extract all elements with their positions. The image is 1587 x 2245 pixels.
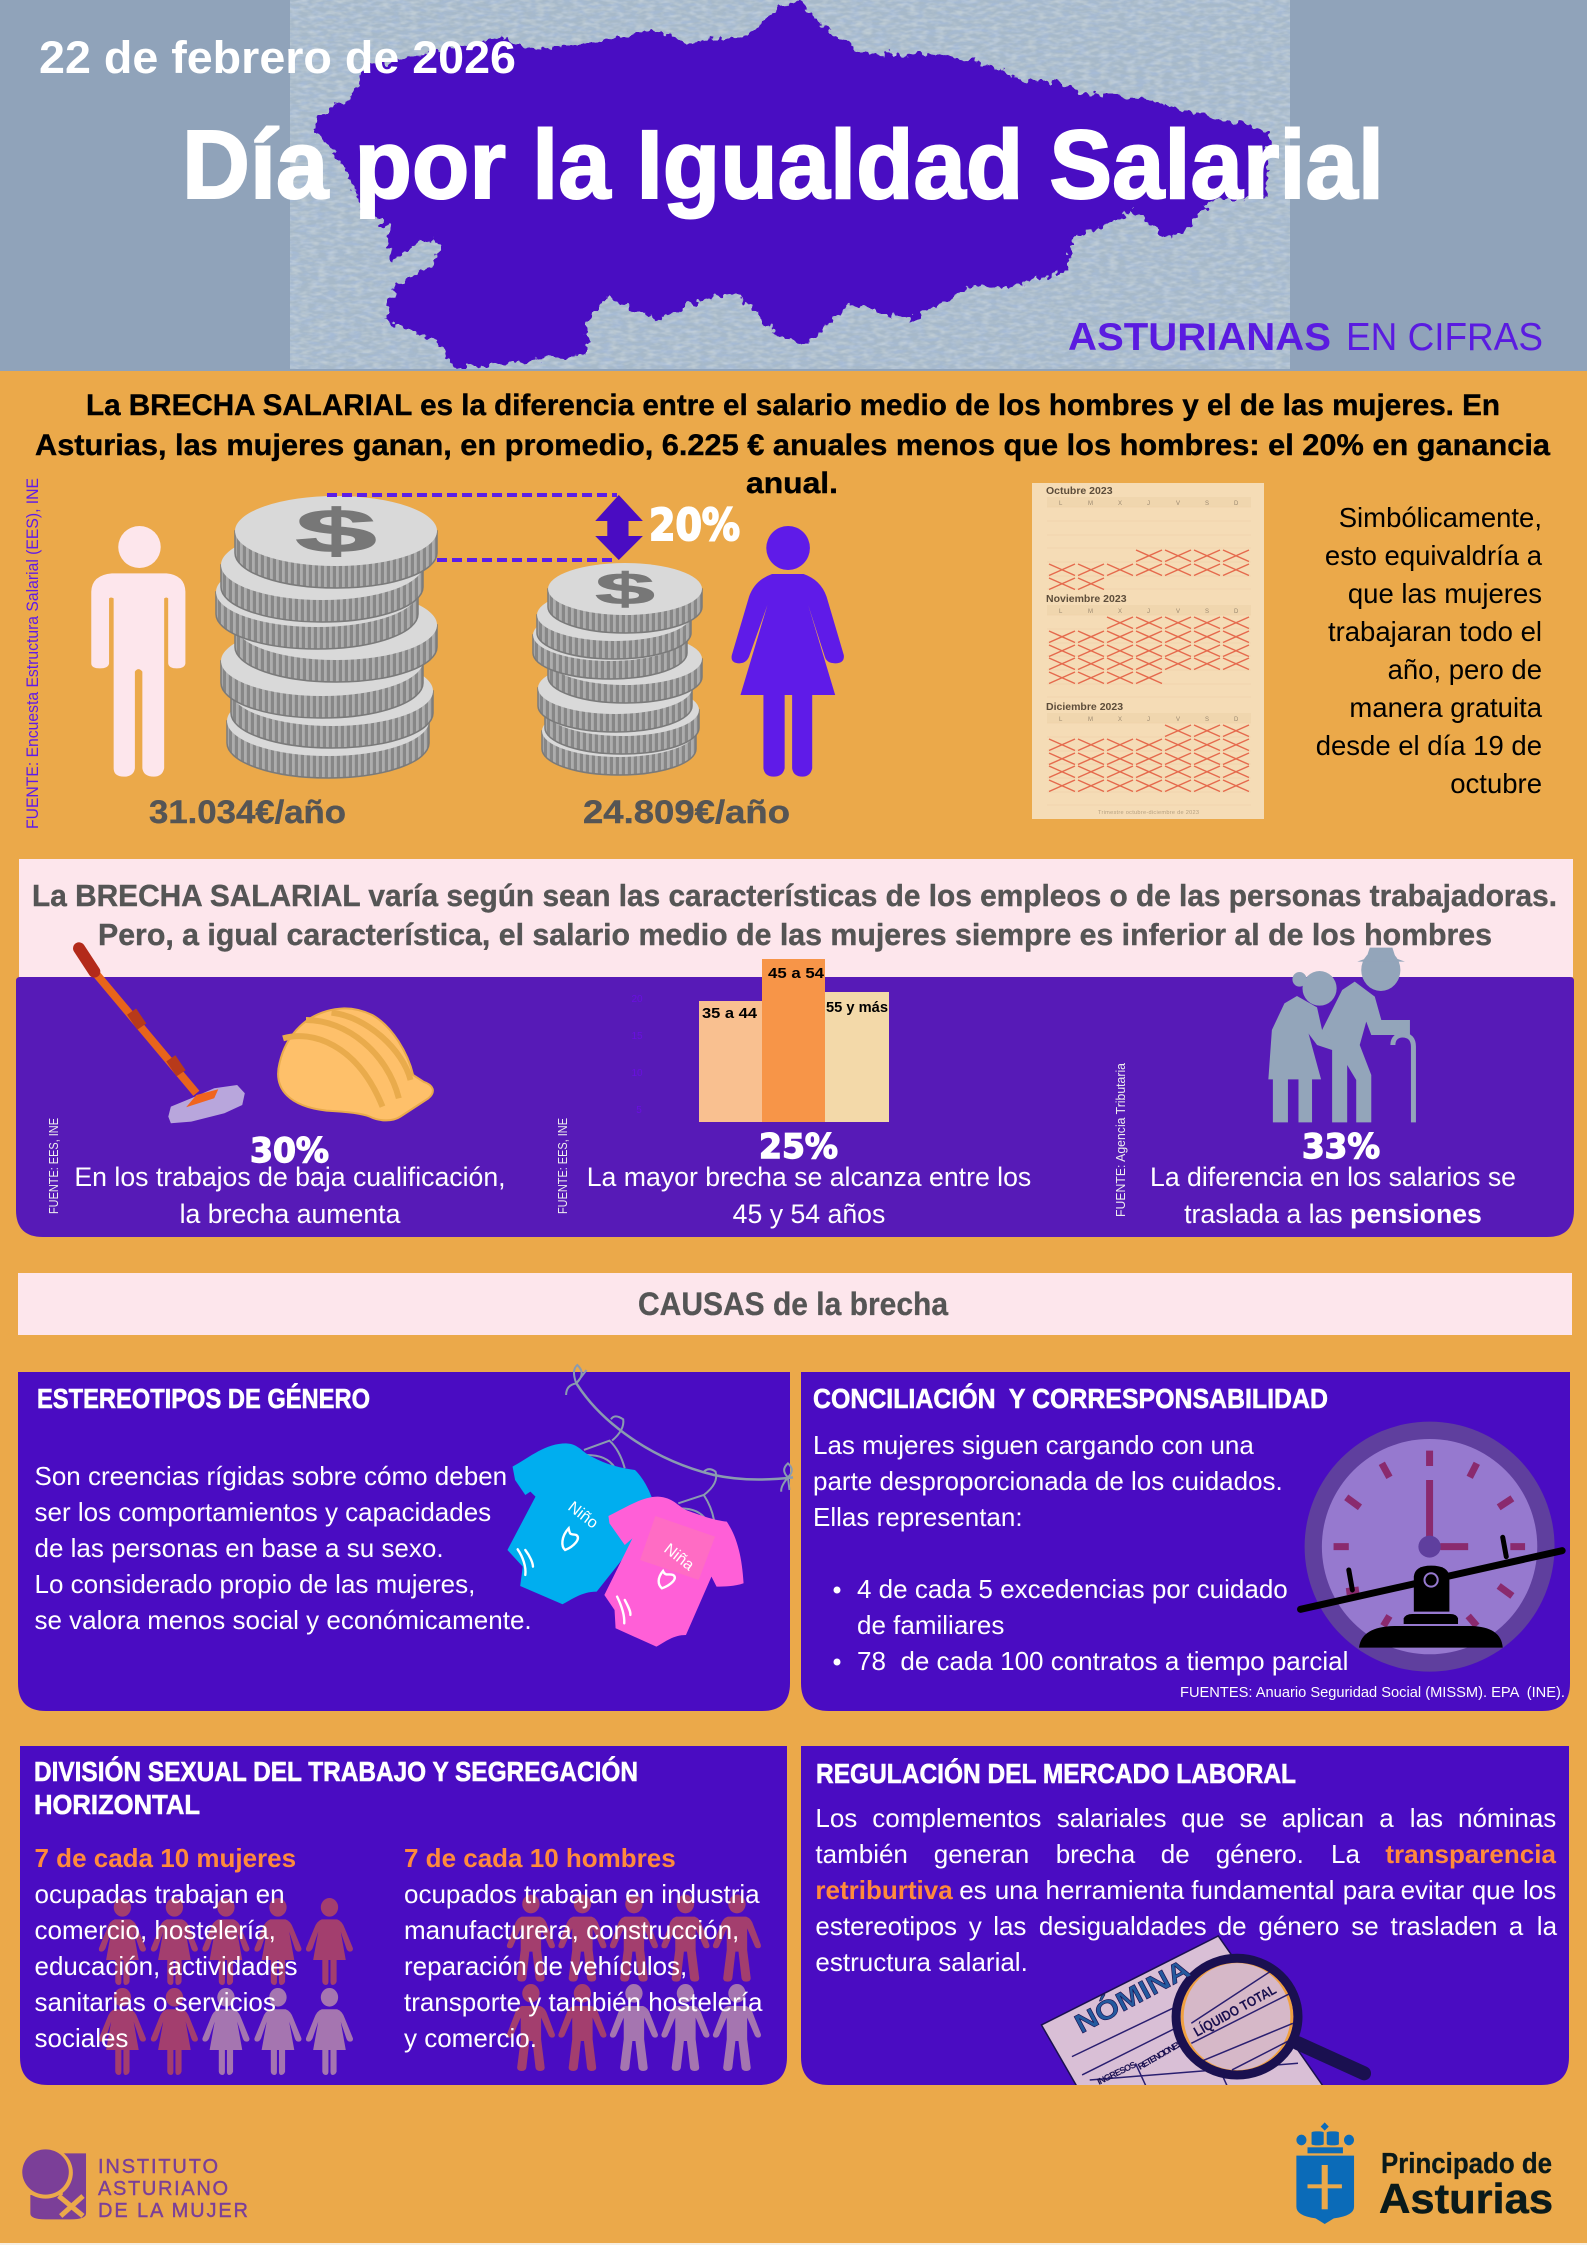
date: 22 de febrero de 2026 <box>39 32 516 83</box>
wordmark <box>1379 2148 1553 2222</box>
heading: DIVISIÓN SEXUAL DEL TRABAJO Y SEGREGACIÓN <box>34 1756 638 1787</box>
bar chart: age groups: 55 y más <box>826 999 888 1016</box>
intro definition text: anual. <box>746 467 838 500</box>
body text: La <box>1331 1839 1360 1869</box>
body text: también <box>815 1839 908 1869</box>
male salary: 31.034€/año <box>149 794 346 830</box>
panel: variation stats <box>16 948 1574 1237</box>
symbolic explanation text: trabajaran todo el <box>1328 616 1542 647</box>
illustration: clock and seesaw <box>1301 1422 1562 1672</box>
body text: ser los comportamientos y capacidades <box>34 1497 491 1527</box>
women text <box>34 1843 298 2053</box>
small coin stack: $ <box>595 564 655 614</box>
calendar image: Trimestre octubre-diciembre de 2023 <box>1098 810 1199 816</box>
calendar image: V <box>1176 717 1180 723</box>
bullet list <box>834 1574 1348 1676</box>
icon: shield with crown and cross <box>1296 2122 1354 2224</box>
calendar image: X <box>1118 501 1122 507</box>
heading: CONCILIACIÓN Y CORRESPONSABILIDAD <box>813 1383 1328 1414</box>
bar chart: age groups <box>631 959 889 1122</box>
source: Agencia Tributaria: FUENTE: Agencia Tributaria <box>1113 1062 1128 1217</box>
gap percent: 20% <box>649 500 740 551</box>
calendar image: M <box>1088 717 1093 723</box>
calendar image: J <box>1147 717 1150 723</box>
woman figure <box>732 526 844 777</box>
panel: pink variation heading: La BRECHA SALARIAL varía según sean las características de los empleos o de las personas trabajadoras. <box>32 878 1557 913</box>
wordmark: Principado de <box>1381 2148 1552 2180</box>
body text: transparencia <box>1385 1839 1556 1869</box>
symbolic explanation text: año, pero de <box>1388 654 1542 685</box>
logo: Instituto Asturiano de la Mujer: ASTURIANO <box>98 2178 228 2200</box>
panel: causes heading <box>18 1273 1572 1335</box>
stat: low qualification <box>74 1131 506 1229</box>
calendar image: V <box>1176 609 1180 615</box>
stat: age: 45 y 54 años <box>733 1199 885 1229</box>
body text: estructura salarial. <box>815 1947 1028 1977</box>
illustration: baby clothes on a line: Niña <box>661 1541 697 1574</box>
stat: pensions: 33% <box>1302 1127 1380 1167</box>
calendar image: D <box>1234 609 1239 615</box>
panel: work-life balance <box>801 1372 1570 1711</box>
sources: FUENTES: Anuario Seguridad Social (MISSM). EPA (INE). <box>1180 1684 1565 1701</box>
panel: pink variation heading <box>19 859 1573 977</box>
calendar image: X <box>1118 609 1122 615</box>
november crosses <box>1049 617 1249 684</box>
body text: género <box>1258 1911 1339 1941</box>
heading: REGULACIÓN DEL MERCADO LABORAL <box>816 1758 1296 1789</box>
body text: fundamental <box>1191 1875 1334 1905</box>
body text: se <box>1240 1803 1267 1833</box>
stat: pensions: traslada a las pensiones <box>1184 1199 1482 1229</box>
illustration: payslip and magnifier: LÍQUIDO TOTAL <box>1191 1981 1279 2040</box>
calendar image: M <box>1088 609 1093 615</box>
body text: Los <box>815 1803 857 1833</box>
calendar image: X <box>1118 717 1122 723</box>
intro definition text <box>35 389 1550 500</box>
female salary: 24.809€/año <box>583 794 790 830</box>
calendar image: S <box>1205 717 1209 723</box>
source: EES 1: FUENTE: EES, INE <box>46 1118 61 1214</box>
body text: una <box>995 1875 1039 1905</box>
symbolic explanation text: octubre <box>1450 768 1542 799</box>
intro definition text: La BRECHA SALARIAL es la diferencia entre el salario medio de los hombres y el de las mujeres. En <box>86 389 1500 422</box>
symbolic explanation text: Simbólicamente, <box>1339 502 1542 533</box>
calendar image <box>1032 483 1264 819</box>
body text: las <box>993 1911 1026 1941</box>
stat: pensions: La diferencia en los salarios se <box>1150 1162 1516 1192</box>
calendar image: Noviembre 2023 <box>1046 593 1127 605</box>
stat: age <box>587 1127 1031 1229</box>
bullet list: 78 de cada 100 contratos a tiempo parcial <box>857 1646 1348 1676</box>
bar chart: age groups: 20 <box>631 994 643 1005</box>
body text: los <box>1523 1875 1556 1905</box>
body text: la <box>1537 1911 1558 1941</box>
men text: transporte y también hostelería <box>404 1987 763 2017</box>
men text: y comercio. <box>404 2023 537 2053</box>
body text: para <box>1343 1875 1395 1905</box>
body text: evitar <box>1401 1875 1465 1905</box>
stat: low qualification: la brecha aumenta <box>180 1199 401 1229</box>
illustration: payslip and magnifier: INGRESOS <box>1095 2059 1138 2087</box>
calendar image: S <box>1205 501 1209 507</box>
body text: y <box>969 1911 982 1941</box>
gap indicator <box>327 495 740 560</box>
body text: trasladen <box>1390 1911 1497 1941</box>
body text: se valora menos social y económicamente. <box>34 1605 532 1635</box>
icon: elderly couple <box>1268 948 1413 1122</box>
stat: pensions <box>1150 1127 1516 1229</box>
women text: ocupadas trabajan en <box>34 1879 285 1909</box>
logo: Instituto Asturiano de la Mujer <box>18 2147 248 2222</box>
calendar image: M <box>1088 501 1093 507</box>
stat: low qualification: En los trabajos de baja cualificación, <box>74 1162 506 1192</box>
panel: gender stereotypes <box>18 1365 793 1711</box>
body text <box>813 1430 1283 1532</box>
calendar image: L <box>1059 717 1063 723</box>
illustration: payslip and magnifier: NÓMINA <box>1069 1953 1195 2039</box>
body text: que <box>1472 1875 1515 1905</box>
logo: Instituto Asturiano de la Mujer: DE LA MUJER <box>98 2200 248 2222</box>
body text: aplican <box>1282 1803 1364 1833</box>
body text: retriburtiva <box>815 1875 953 1905</box>
calendar image: L <box>1059 609 1063 615</box>
double arrow <box>595 495 643 560</box>
body text: a <box>1379 1803 1394 1833</box>
symbolic explanation text: que las mujeres <box>1348 578 1542 609</box>
panel: pink variation heading: Pero, a igual característica, el salario medio de las mujeres siempre es inferior al de los hombres <box>98 917 1492 952</box>
bar chart: age groups: 45 a 54 <box>768 965 825 982</box>
bar chart: age groups: 15 <box>631 1031 643 1042</box>
map of Asturias <box>314 0 1270 368</box>
body text: a <box>1509 1911 1524 1941</box>
large coin stack <box>216 496 437 778</box>
panel: sexual division of labour <box>20 1746 787 2085</box>
body text: de las personas en base a su sexo. <box>34 1533 444 1563</box>
body text: brecha <box>1056 1839 1136 1869</box>
body text: Ellas representan: <box>813 1502 1023 1532</box>
panel: causes heading: CAUSAS de la brecha <box>638 1286 948 1322</box>
women text: educación, actividades <box>34 1951 298 1981</box>
series label: ASTURIANAS <box>1068 316 1331 359</box>
october crosses <box>1049 550 1249 590</box>
panel: labour market regulation <box>801 1746 1569 2087</box>
symbolic explanation text <box>1316 502 1543 799</box>
body text: que <box>1181 1803 1225 1833</box>
bullet list: de familiares <box>857 1610 1004 1640</box>
icon: mop <box>79 948 245 1123</box>
large coin stack: $ <box>295 497 377 565</box>
bar chart: age groups: 35 a 44 <box>702 1005 758 1022</box>
body text: es <box>959 1875 987 1905</box>
icon: hard hat <box>278 1008 433 1120</box>
title: Día por la Igualdad Salarial <box>182 110 1384 219</box>
stat: low qualification: 30% <box>250 1131 329 1171</box>
body text: de <box>1161 1839 1190 1869</box>
body text: parte desproporcionada de los cuidados. <box>813 1466 1283 1496</box>
body text: desigualdades <box>1039 1911 1207 1941</box>
symbolic explanation text: manera gratuita <box>1349 692 1543 723</box>
men text: reparación de vehículos, <box>404 1951 687 1981</box>
logo: Principado de Asturias <box>1296 2122 1553 2224</box>
december crosses <box>1049 725 1249 792</box>
calendar image: Octubre 2023 <box>1046 485 1113 497</box>
pictogram: 7 of 10 women <box>99 1898 353 2075</box>
body text: Son creencias rígidas sobre cómo deben <box>34 1461 507 1491</box>
bar chart: age groups: 10 <box>631 1068 643 1079</box>
women text: comercio, hostelería, <box>34 1915 276 1945</box>
pictogram: 7 of 10 men <box>507 1895 761 2071</box>
body text: estereotipos <box>815 1911 957 1941</box>
wordmark: Asturias <box>1379 2175 1553 2222</box>
illustration: baby clothes on a line <box>507 1365 793 1647</box>
men text <box>404 1843 763 2053</box>
calendar image: J <box>1147 501 1150 507</box>
body text: generan <box>934 1839 1029 1869</box>
symbolic explanation text: esto equivaldría a <box>1325 540 1543 571</box>
body text: herramienta <box>1046 1875 1185 1905</box>
man figure <box>91 526 185 777</box>
series label: EN CIFRAS <box>1346 316 1543 359</box>
panel: sexual division of labour: HORIZONTAL <box>34 1789 200 1820</box>
men text: 7 de cada 10 hombres <box>404 1843 676 1873</box>
bullet list: 4 de cada 5 excedencias por cuidado <box>857 1574 1288 1604</box>
women text: sanitarias o servicios <box>34 1987 276 2017</box>
women text: sociales <box>34 2023 128 2053</box>
body text: salariales <box>1057 1803 1167 1833</box>
bar chart: age groups: 5 <box>636 1105 642 1116</box>
small coin stack <box>533 563 702 775</box>
intro definition text: Asturias, las mujeres ganan, en promedio, 6.225 € anuales menos que los hombres: el 20% en ganancia <box>35 429 1550 462</box>
body text: complementos <box>872 1803 1041 1833</box>
men text: manufacturera, construcción, <box>404 1915 739 1945</box>
source note: FUENTE: Encuesta Estructura Salarial (EES), INE <box>23 478 42 829</box>
illustration: payslip and magnifier: RETENCIONES <box>1136 2038 1184 2072</box>
logo: Instituto Asturiano de la Mujer: INSTITUTO <box>98 2156 218 2178</box>
illustration: payslip and magnifier <box>1041 1936 1364 2087</box>
calendar image: L <box>1059 501 1063 507</box>
calendar image: Diciembre 2023 <box>1046 701 1123 713</box>
symbolic explanation text: desde el día 19 de <box>1316 730 1542 761</box>
body text: Las mujeres siguen cargando con una <box>813 1430 1254 1460</box>
calendar image: V <box>1176 501 1180 507</box>
stat: age: 25% <box>759 1127 838 1167</box>
calendar image: D <box>1234 501 1239 507</box>
heading: ESTEREOTIPOS DE GÉNERO <box>37 1383 370 1414</box>
men text: ocupados trabajan en industria <box>404 1879 760 1909</box>
body text <box>815 1803 1558 1977</box>
header banner <box>0 0 1587 371</box>
illustration: baby clothes on a line: Niño <box>565 1499 601 1532</box>
body text: de <box>1218 1911 1247 1941</box>
stat: age: La mayor brecha se alcanza entre los <box>587 1162 1031 1192</box>
body text: Lo considerado propio de las mujeres, <box>34 1569 475 1599</box>
calendar image: D <box>1234 717 1239 723</box>
body text: género. <box>1216 1839 1304 1869</box>
body text: las <box>1410 1803 1443 1833</box>
women text: 7 de cada 10 mujeres <box>34 1843 296 1873</box>
body text: se <box>1351 1911 1379 1941</box>
source: EES 2: FUENTE: EES, INE <box>555 1118 570 1214</box>
body text <box>34 1461 532 1635</box>
calendar image: S <box>1205 609 1209 615</box>
calendar image: J <box>1147 609 1150 615</box>
body text: nóminas <box>1458 1803 1556 1833</box>
